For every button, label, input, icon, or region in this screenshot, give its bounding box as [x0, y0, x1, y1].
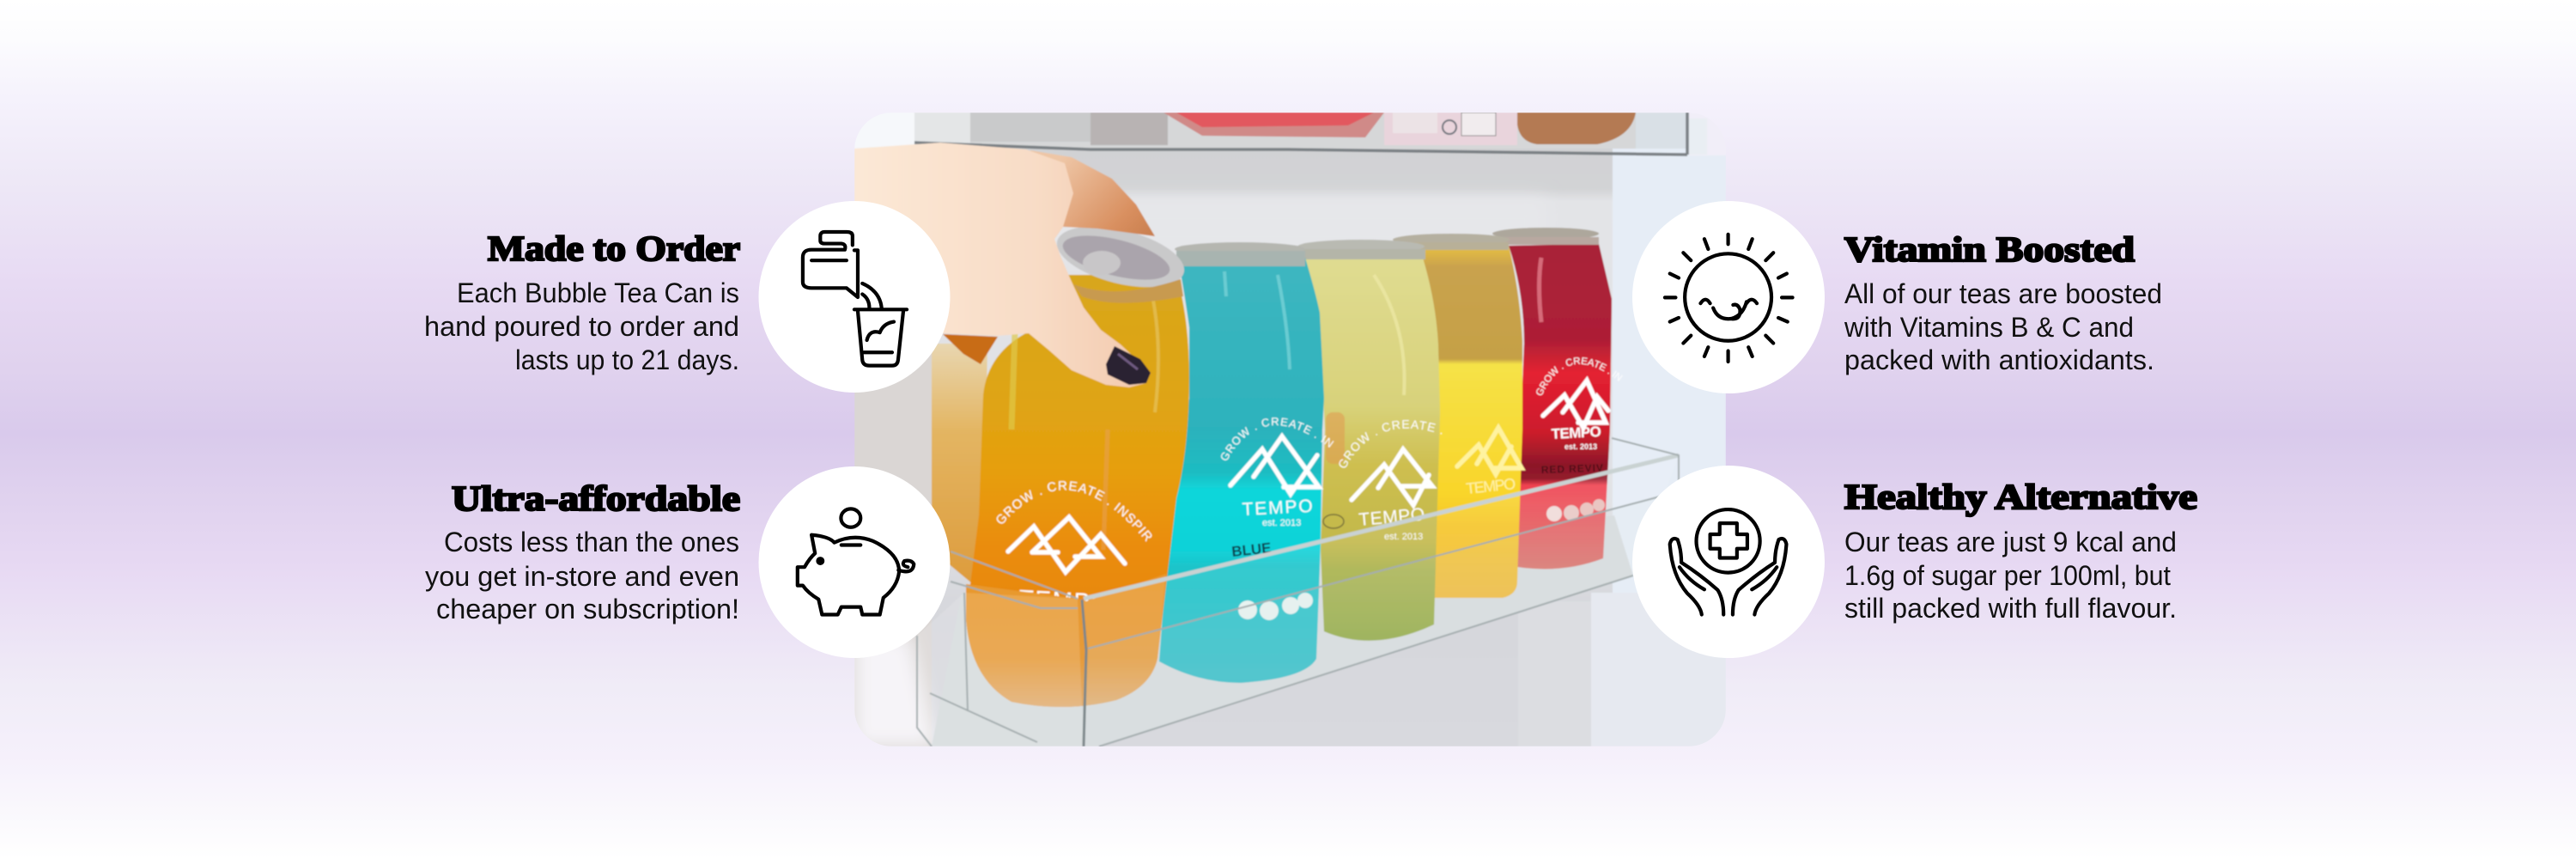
description: All of our teas are boosted — [1844, 278, 2162, 309]
feature: Made to Order — [424, 201, 950, 393]
feature: Healthy Alternative — [1632, 466, 2197, 658]
red can: TEMPO — [1551, 423, 1601, 442]
icon: hands holding medical cross — [1670, 509, 1786, 615]
description: with Vitamins B & C and — [1844, 312, 2134, 343]
shelf floor — [932, 515, 1633, 746]
green can: GROW . CREATE . — [1338, 419, 1443, 469]
upper shelf with food — [914, 113, 1707, 155]
description: lasts up to 21 days. — [515, 344, 739, 375]
teal can: GROW . CREATE . INSPIRE — [1219, 416, 1334, 462]
orange can: TEMPO — [1018, 585, 1110, 617]
heading: Vitamin Boosted — [1844, 229, 2135, 269]
description: 1.6g of sugar per 100ml, but — [1844, 560, 2171, 591]
description: cheaper on subscription! — [436, 594, 739, 624]
teal can — [759, 201, 1334, 684]
description: hand poured to order and — [424, 311, 739, 342]
description: packed with antioxidants. — [1844, 344, 2154, 375]
description — [1844, 527, 2177, 624]
orange can: GROW . CREATE . INSPIRE — [995, 479, 1153, 543]
red can: est. 2013 — [1564, 442, 1597, 451]
description: you get in-store and even — [425, 561, 739, 592]
feature: Ultra-affordable — [425, 466, 950, 658]
description — [1844, 278, 2162, 375]
icon circle — [1632, 201, 1825, 393]
can lid — [1056, 227, 1185, 304]
description — [425, 527, 739, 624]
red can: RED REVIV — [1541, 461, 1603, 476]
description: still packed with full flavour. — [1844, 593, 2177, 624]
description: Each Bubble Tea Can is — [457, 277, 739, 308]
fridge interior — [854, 113, 1726, 746]
photo: hand taking bubble tea cans from fridge door — [854, 113, 1726, 746]
gold can: TEMPO — [1465, 475, 1516, 497]
gold can — [1393, 234, 1522, 598]
icon: smiling sun — [1665, 235, 1793, 362]
icon circle — [759, 201, 950, 393]
green can — [1298, 239, 1443, 642]
red can: GROW . CREATE . INSPIRE — [1535, 356, 1623, 397]
orange can — [759, 201, 1212, 708]
teal can: est. 2013 — [1262, 518, 1301, 528]
icon: pouring jug and cup — [803, 232, 907, 366]
heading: Ultra-affordable — [452, 478, 740, 518]
heading: Healthy Alternative — [1844, 477, 2197, 516]
description: Our teas are just 9 kcal and — [1844, 527, 2177, 557]
description — [424, 277, 739, 375]
icon: piggy bank and coin — [798, 509, 914, 615]
red can — [759, 201, 1623, 598]
icon circle — [759, 466, 950, 658]
description: Costs less than the ones — [444, 527, 739, 557]
fridge door shelf — [917, 438, 1679, 746]
teal can: BLUE — [1230, 539, 1272, 560]
hand — [854, 143, 1155, 387]
icon circle — [1632, 466, 1825, 658]
feature: Vitamin Boosted — [1632, 201, 2162, 393]
heading: Made to Order — [488, 228, 740, 268]
teal can: TEMPO — [1242, 497, 1313, 520]
green can: est. 2013 — [1384, 532, 1423, 542]
green can: TEMPO — [1358, 504, 1425, 530]
